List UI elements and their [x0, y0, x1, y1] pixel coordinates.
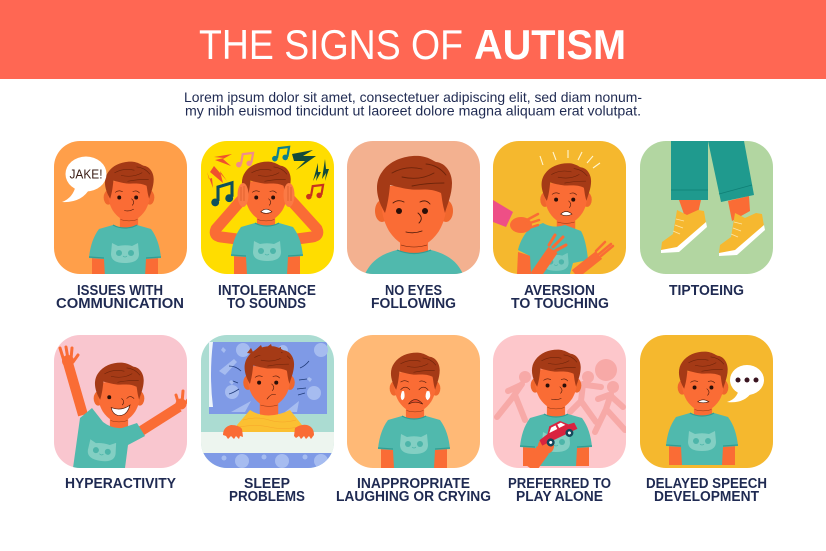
- label: inappropriate laughing or crying: [336, 476, 491, 505]
- panel: inappropriate laughing or crying: [347, 335, 480, 468]
- label: sleep problems: SLEEP: [244, 476, 290, 492]
- toy car: [540, 420, 578, 446]
- panel: issues with communication: [54, 141, 187, 277]
- panel: delayed speech development: [640, 335, 773, 468]
- icon: boy turning to name: [89, 162, 161, 277]
- title: [199, 21, 626, 68]
- title: THE SIGNS OF: [199, 21, 463, 68]
- icon: boy covering ears: [215, 162, 318, 275]
- label: issues with communication: ISSUES WITH: [77, 283, 163, 299]
- label: sleep problems: [229, 476, 305, 505]
- speech bubble: silence: [727, 365, 764, 402]
- label: intolerance to sounds: INTOLERANCE: [218, 283, 316, 299]
- icon: legs on tiptoe: [661, 141, 765, 256]
- label: preferred to play alone: PREFERRED TO: [508, 476, 611, 492]
- icon: boy holding toy car: [520, 350, 592, 468]
- panel: preferred to play alone: [493, 335, 626, 468]
- rays: [540, 150, 600, 168]
- intro paragraph: Lorem ipsum dolor sit amet, consectetuer adipiscing elit, sed diam nonum-: [184, 89, 642, 105]
- panel: intolerance to sounds: [201, 141, 334, 275]
- panel: no eyes following: [347, 141, 480, 274]
- panel: tiptoeing: [640, 141, 773, 274]
- icon: crying boy: [378, 353, 450, 468]
- label: delayed speech development: DEVELOPMENT: [654, 489, 759, 505]
- label: issues with communication: [56, 283, 184, 312]
- label: tiptoeing: TIPTOEING: [669, 283, 744, 299]
- icon: boy looking away: [365, 156, 463, 274]
- intro paragraph: my nibh euismod tincidunt ut laoreet dolore magna aliquam erat volutpat.: [185, 102, 641, 118]
- approaching hand: [493, 200, 513, 227]
- pillow: [209, 342, 328, 414]
- header banner: [0, 0, 826, 79]
- label: sleep problems: PROBLEMS: [229, 489, 305, 505]
- intro paragraph: [184, 89, 642, 118]
- panel: sleep problems: [201, 335, 334, 468]
- label: inappropriate laughing or crying: INAPPROPRIATE: [357, 476, 470, 492]
- icon: boy awake in bed: [201, 344, 334, 468]
- icon: boy with raised arms: [60, 347, 190, 468]
- panel: aversion to touching: [493, 141, 626, 276]
- label: aversion to touching: [511, 283, 609, 312]
- label: hyperactivity: HYPERACTIVITY: [65, 476, 176, 492]
- label: intolerance to sounds: [218, 283, 316, 312]
- speech bubble: Jake: JAKE!: [70, 168, 102, 182]
- label: aversion to touching: AVERSION: [524, 283, 595, 299]
- title: AUTISM: [474, 21, 626, 68]
- icon: boy flinching from hand: [493, 150, 613, 276]
- label: no eyes following: FOLLOWING: [371, 296, 456, 312]
- label: intolerance to sounds: TO SOUNDS: [227, 296, 306, 312]
- label: preferred to play alone: [508, 476, 611, 505]
- panel: hyperactivity: [54, 335, 190, 468]
- icon: boy unable to speak: [666, 352, 738, 465]
- label: delayed speech development: [646, 476, 767, 505]
- label: no eyes following: [371, 283, 456, 312]
- icons: music notes and noise bolts: [207, 144, 329, 206]
- label: inappropriate laughing or crying: LAUGHING OR CRYING: [336, 489, 491, 505]
- label: delayed speech development: DELAYED SPEECH: [646, 476, 767, 492]
- label: preferred to play alone: PLAY ALONE: [516, 489, 603, 505]
- label: aversion to touching: TO TOUCHING: [511, 296, 609, 312]
- other children playing: [497, 359, 625, 432]
- label: no eyes following: NO EYES: [385, 283, 442, 299]
- label: issues with communication: COMMUNICATION: [56, 296, 184, 312]
